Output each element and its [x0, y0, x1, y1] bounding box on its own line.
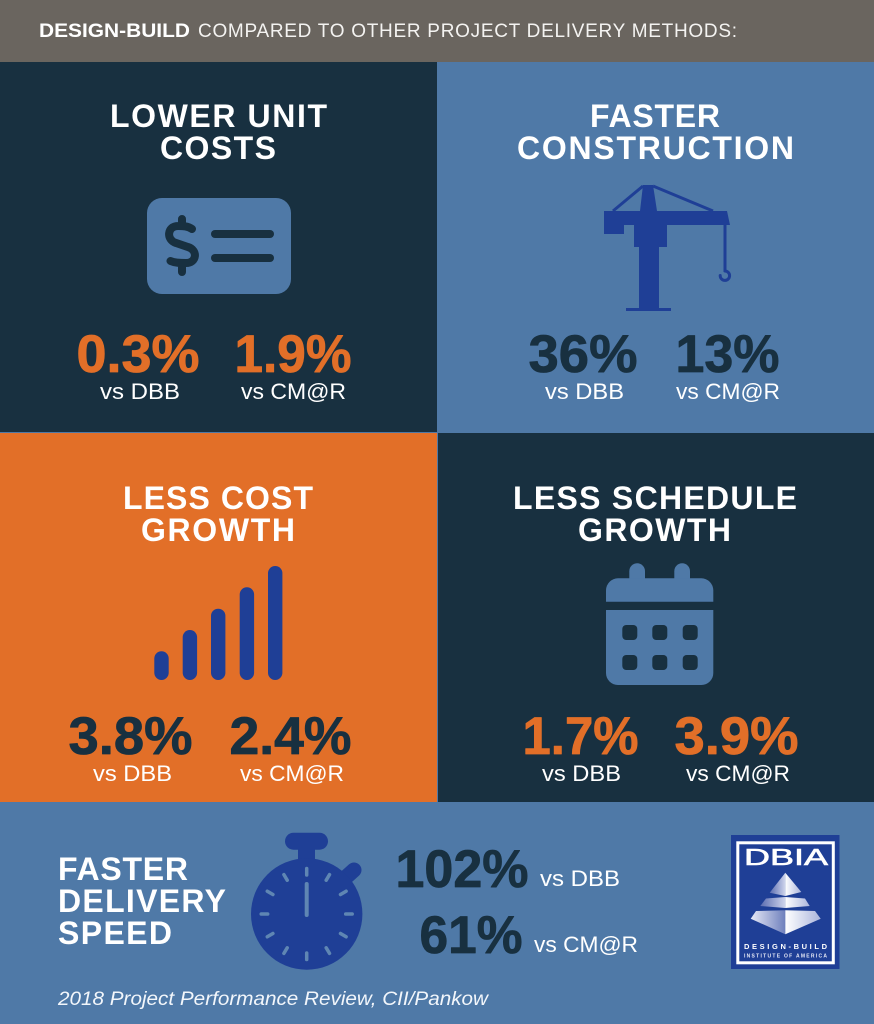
- heading: less cost growth: [123, 480, 313, 548]
- panel: lower unit costs: [0, 62, 437, 432]
- panel: less schedule growth: [438, 433, 874, 802]
- heading: faster construction: FASTER: [590, 98, 720, 134]
- source citation: 2018 Project Performance Review, CII/Pankow: [57, 989, 489, 1010]
- heading: less cost growth: GROWTH: [141, 512, 295, 548]
- stat: 0.3% vs DBB: 0.3%: [76, 325, 200, 384]
- stat: 1.9% vs CM@R: 1.9%: [234, 325, 352, 384]
- stat: 13% vs CM@R: 13%: [676, 325, 780, 384]
- heading: faster construction: CONSTRUCTION: [517, 130, 794, 166]
- heading: less schedule growth: GROWTH: [578, 512, 731, 548]
- logo: DBIA: DBIA: [744, 844, 829, 870]
- header band: [0, 0, 874, 62]
- heading: lower unit costs: LOWER UNIT: [110, 98, 327, 134]
- stat: 3.9% vs CM@R: 3.9%: [674, 707, 798, 766]
- heading: less schedule growth: LESS SCHEDULE: [513, 480, 797, 516]
- logo: DBIA: INSTITUTE OF AMERICA: [744, 954, 827, 960]
- heading: faster delivery speed: FASTER: [58, 851, 188, 887]
- stat: 61% vs CM@R: [420, 906, 638, 965]
- icon: rising bars: [154, 566, 282, 680]
- heading: faster delivery speed: SPEED: [58, 915, 172, 951]
- icon: calendar: [606, 563, 713, 685]
- heading: less schedule growth: [513, 480, 797, 548]
- heading: faster construction: [517, 98, 794, 166]
- header band: COMPARED TO OTHER PROJECT DELIVERY METHODS:: [198, 21, 737, 42]
- stat: 36% vs DBB: 36%: [528, 325, 638, 384]
- header band: DESIGN-BUILD: [39, 21, 190, 42]
- logo: DBIA: [731, 835, 840, 969]
- logo: DBIA: DESIGN-BUILD: [744, 942, 828, 951]
- stat: 2.4% vs CM@R: vs CM@R: [240, 761, 344, 786]
- stat: 102% vs DBB: [396, 840, 620, 899]
- panel: faster construction: [438, 62, 874, 432]
- stat: 1.9% vs CM@R: vs CM@R: [241, 379, 346, 404]
- stat: 36% vs DBB: vs DBB: [545, 379, 624, 404]
- heading: faster delivery speed: DELIVERY: [58, 883, 226, 919]
- panel: less cost growth: [0, 433, 437, 802]
- stat: 3.8% vs DBB: vs DBB: [93, 761, 172, 786]
- stat: 1.7% vs DBB: vs DBB: [542, 761, 621, 786]
- heading: lower unit costs: [110, 98, 327, 166]
- stat: 3.8% vs DBB: 3.8%: [68, 707, 192, 766]
- stat: 2.4% vs CM@R: 2.4%: [230, 707, 352, 766]
- stat: 0.3% vs DBB: vs DBB: [100, 379, 180, 404]
- stat: 102% vs DBB: vs DBB: [540, 866, 620, 891]
- stat: 1.7% vs DBB: 1.7%: [522, 707, 638, 766]
- icon: tower crane: [604, 185, 730, 311]
- heading: faster delivery speed: [58, 851, 226, 951]
- icon: dollar bill: [147, 198, 291, 294]
- stat: 61% vs CM@R: vs CM@R: [534, 932, 638, 957]
- heading: less cost growth: LESS COST: [123, 480, 313, 516]
- stat: 13% vs CM@R: vs CM@R: [676, 379, 780, 404]
- stat: 61% vs CM@R: 61%: [420, 906, 522, 965]
- stat: 3.9% vs CM@R: vs CM@R: [686, 761, 790, 786]
- panel: faster delivery speed: [0, 803, 874, 1024]
- stat: 102% vs DBB: 102%: [396, 840, 528, 899]
- icon: stopwatch: [251, 833, 362, 970]
- heading: lower unit costs: COSTS: [160, 130, 276, 166]
